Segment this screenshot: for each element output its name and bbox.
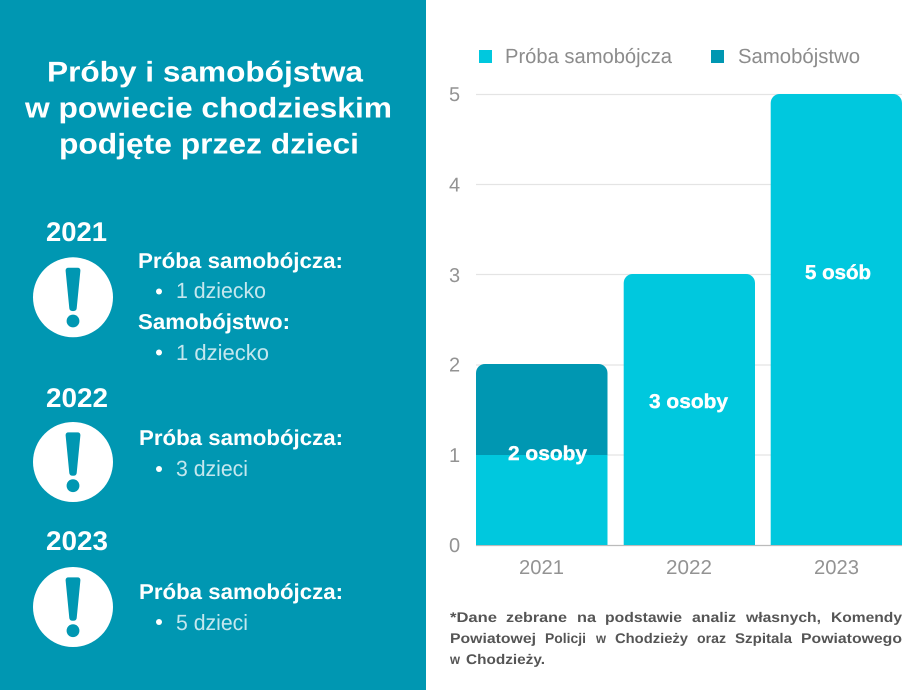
footnote: Chodzieży. [466, 651, 545, 667]
bar 2021 [476, 364, 608, 545]
chart legend: Samobójstwo [738, 45, 860, 68]
y axis labels: 4 [449, 174, 460, 196]
details 2022: Próba samobójcza: [139, 426, 343, 450]
details 2021: 1 dziecko [176, 340, 269, 365]
footnote: *Dane [450, 609, 497, 625]
footnote [449, 609, 902, 667]
icon: exclamation 2022 [33, 422, 113, 502]
left panel [0, 0, 426, 690]
footnote: w [595, 630, 606, 646]
title [24, 56, 392, 160]
section: 2022 [33, 383, 343, 502]
title: podjęte przez dzieci [59, 128, 359, 160]
bar 2023 [771, 94, 902, 545]
details 2023 [139, 580, 343, 635]
year 2021: 2021 [46, 217, 107, 247]
footnote: Policji [545, 630, 586, 646]
bar 2021: 2 osoby [508, 443, 588, 465]
y axis labels [449, 84, 460, 557]
y axis labels: 1 [449, 445, 460, 467]
x axis labels: 2021 [519, 557, 564, 579]
y axis labels: 3 [449, 265, 460, 287]
details 2022: 3 dzieci [176, 456, 248, 481]
section: 2021 [33, 217, 343, 365]
x axis labels [519, 557, 859, 579]
section: 2023 [33, 526, 343, 647]
y axis labels: 2 [449, 354, 460, 376]
footnote: w [449, 651, 460, 667]
footnote: podstawie [605, 609, 682, 625]
footnote: własnych, [745, 609, 821, 625]
footnote: analiz [692, 609, 736, 625]
chart legend: Próba samobójcza [505, 45, 673, 68]
footnote: Powiatowego [801, 630, 902, 646]
footnote: oraz [697, 630, 726, 646]
footnote: Chodzieży [615, 630, 688, 646]
year 2023: 2023 [46, 526, 108, 556]
icon: exclamation 2021 [33, 257, 113, 337]
bar 2022: 3 osoby [649, 391, 729, 413]
footnote: Powiatowej [450, 630, 536, 646]
chart legend [479, 45, 860, 68]
icon: exclamation 2023 [33, 567, 113, 647]
footnote: Szpitala [735, 630, 792, 646]
details 2023: Próba samobójcza: [139, 580, 343, 604]
title: w powiecie chodzieskim [24, 92, 392, 124]
details 2021 [138, 249, 343, 365]
details 2022 [139, 426, 343, 481]
details 2023: 5 dzieci [176, 610, 248, 635]
details 2021: Samobójstwo: [138, 310, 290, 334]
footnote: Komendy [831, 609, 902, 625]
details 2021: 1 dziecko [176, 278, 266, 303]
title: Próby i samobójstwa [47, 56, 364, 88]
footnote: na [577, 609, 596, 625]
bar 2022 [624, 274, 755, 545]
footnote: zebrane [506, 609, 567, 625]
year 2022: 2022 [46, 383, 108, 413]
y axis labels: 5 [449, 84, 460, 106]
x axis labels: 2023 [814, 557, 859, 579]
x axis labels: 2022 [666, 557, 712, 579]
bar 2023: 5 osób [805, 262, 871, 284]
details 2021: Próba samobójcza: [138, 249, 343, 273]
y axis labels: 0 [449, 535, 460, 557]
stacked bar chart [449, 84, 902, 579]
